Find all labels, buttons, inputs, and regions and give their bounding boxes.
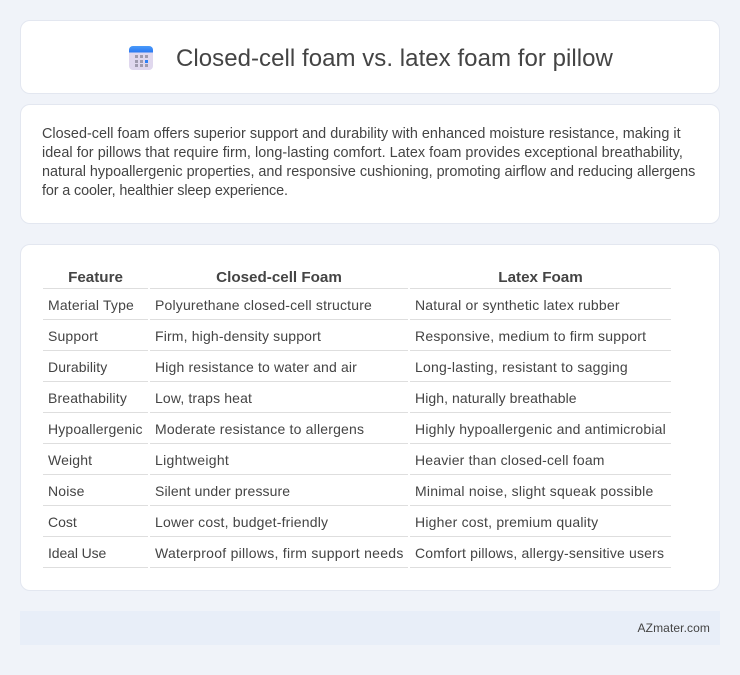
row: cost: Lower cost, budget-friendly — [155, 514, 328, 530]
row: ideal use — [43, 545, 671, 568]
row: support: Firm, high-density support — [155, 328, 321, 344]
row: support: Responsive, medium to firm support — [415, 328, 646, 344]
row: ideal use: Waterproof pillows, firm support needs — [155, 545, 404, 561]
row: durability — [43, 359, 671, 382]
row: noise — [43, 483, 671, 506]
table header: Feature — [68, 269, 123, 286]
row: breathability: Low, traps heat — [155, 390, 252, 406]
row: weight: Weight — [48, 452, 92, 468]
row: noise: Silent under pressure — [155, 483, 290, 499]
row: material type: Polyurethane closed-cell structure — [155, 297, 372, 313]
intro card — [20, 104, 720, 224]
table card — [20, 244, 720, 591]
row: weight: Heavier than closed-cell foam — [415, 452, 605, 468]
intro text: natural hypoallergenic properties, and responsive cushioning, promoting airflow and reducing allergens — [42, 164, 695, 180]
row: hypoallergenic: Highly hypoallergenic and antimicrobial — [415, 421, 666, 437]
row: weight: Lightweight — [155, 452, 229, 468]
intro text: Closed-cell foam offers superior support and durability with enhanced moisture resistance, making it — [42, 126, 681, 142]
row: cost — [43, 514, 671, 537]
row: material type: Material Type — [48, 297, 134, 313]
row: breathability: High, naturally breathable — [415, 390, 577, 406]
intro text: ideal for pillows that require firm, long-lasting comfort. Latex foam provides exceptional breathability, — [42, 145, 683, 161]
row: breathability: Breathability — [48, 390, 127, 406]
footer credit: AZmater.com — [638, 621, 710, 635]
row: noise: Minimal noise, slight squeak possible — [415, 483, 653, 499]
icon: calendar — [129, 46, 153, 70]
intro text — [42, 126, 695, 199]
row: material type: Natural or synthetic latex rubber — [415, 297, 620, 313]
table header — [43, 269, 671, 289]
row: cost: Cost — [48, 514, 77, 530]
row: support: Support — [48, 328, 98, 344]
row: hypoallergenic: Hypoallergenic — [48, 421, 143, 437]
row: weight — [43, 452, 671, 475]
row: support — [43, 328, 671, 351]
footer bar — [20, 611, 720, 645]
row: durability: High resistance to water and air — [155, 359, 357, 375]
row: hypoallergenic — [43, 421, 671, 444]
row: noise: Noise — [48, 483, 85, 499]
row: hypoallergenic: Moderate resistance to allergens — [155, 421, 364, 437]
row: cost: Higher cost, premium quality — [415, 514, 598, 530]
row: durability: Long-lasting, resistant to sagging — [415, 359, 628, 375]
row: material type — [43, 297, 671, 320]
title: Closed-cell foam vs. latex foam for pillow — [176, 45, 613, 72]
table header: Latex Foam — [498, 269, 583, 286]
comparison table — [43, 269, 671, 568]
intro text: for a cooler, healthier sleep experience. — [42, 183, 288, 199]
row: breathability — [43, 390, 671, 413]
row: ideal use: Ideal Use — [48, 545, 106, 561]
row: ideal use: Comfort pillows, allergy-sensitive users — [415, 545, 664, 561]
row: durability: Durability — [48, 359, 107, 375]
table header: Closed-cell Foam — [216, 269, 342, 286]
title card — [20, 20, 720, 94]
